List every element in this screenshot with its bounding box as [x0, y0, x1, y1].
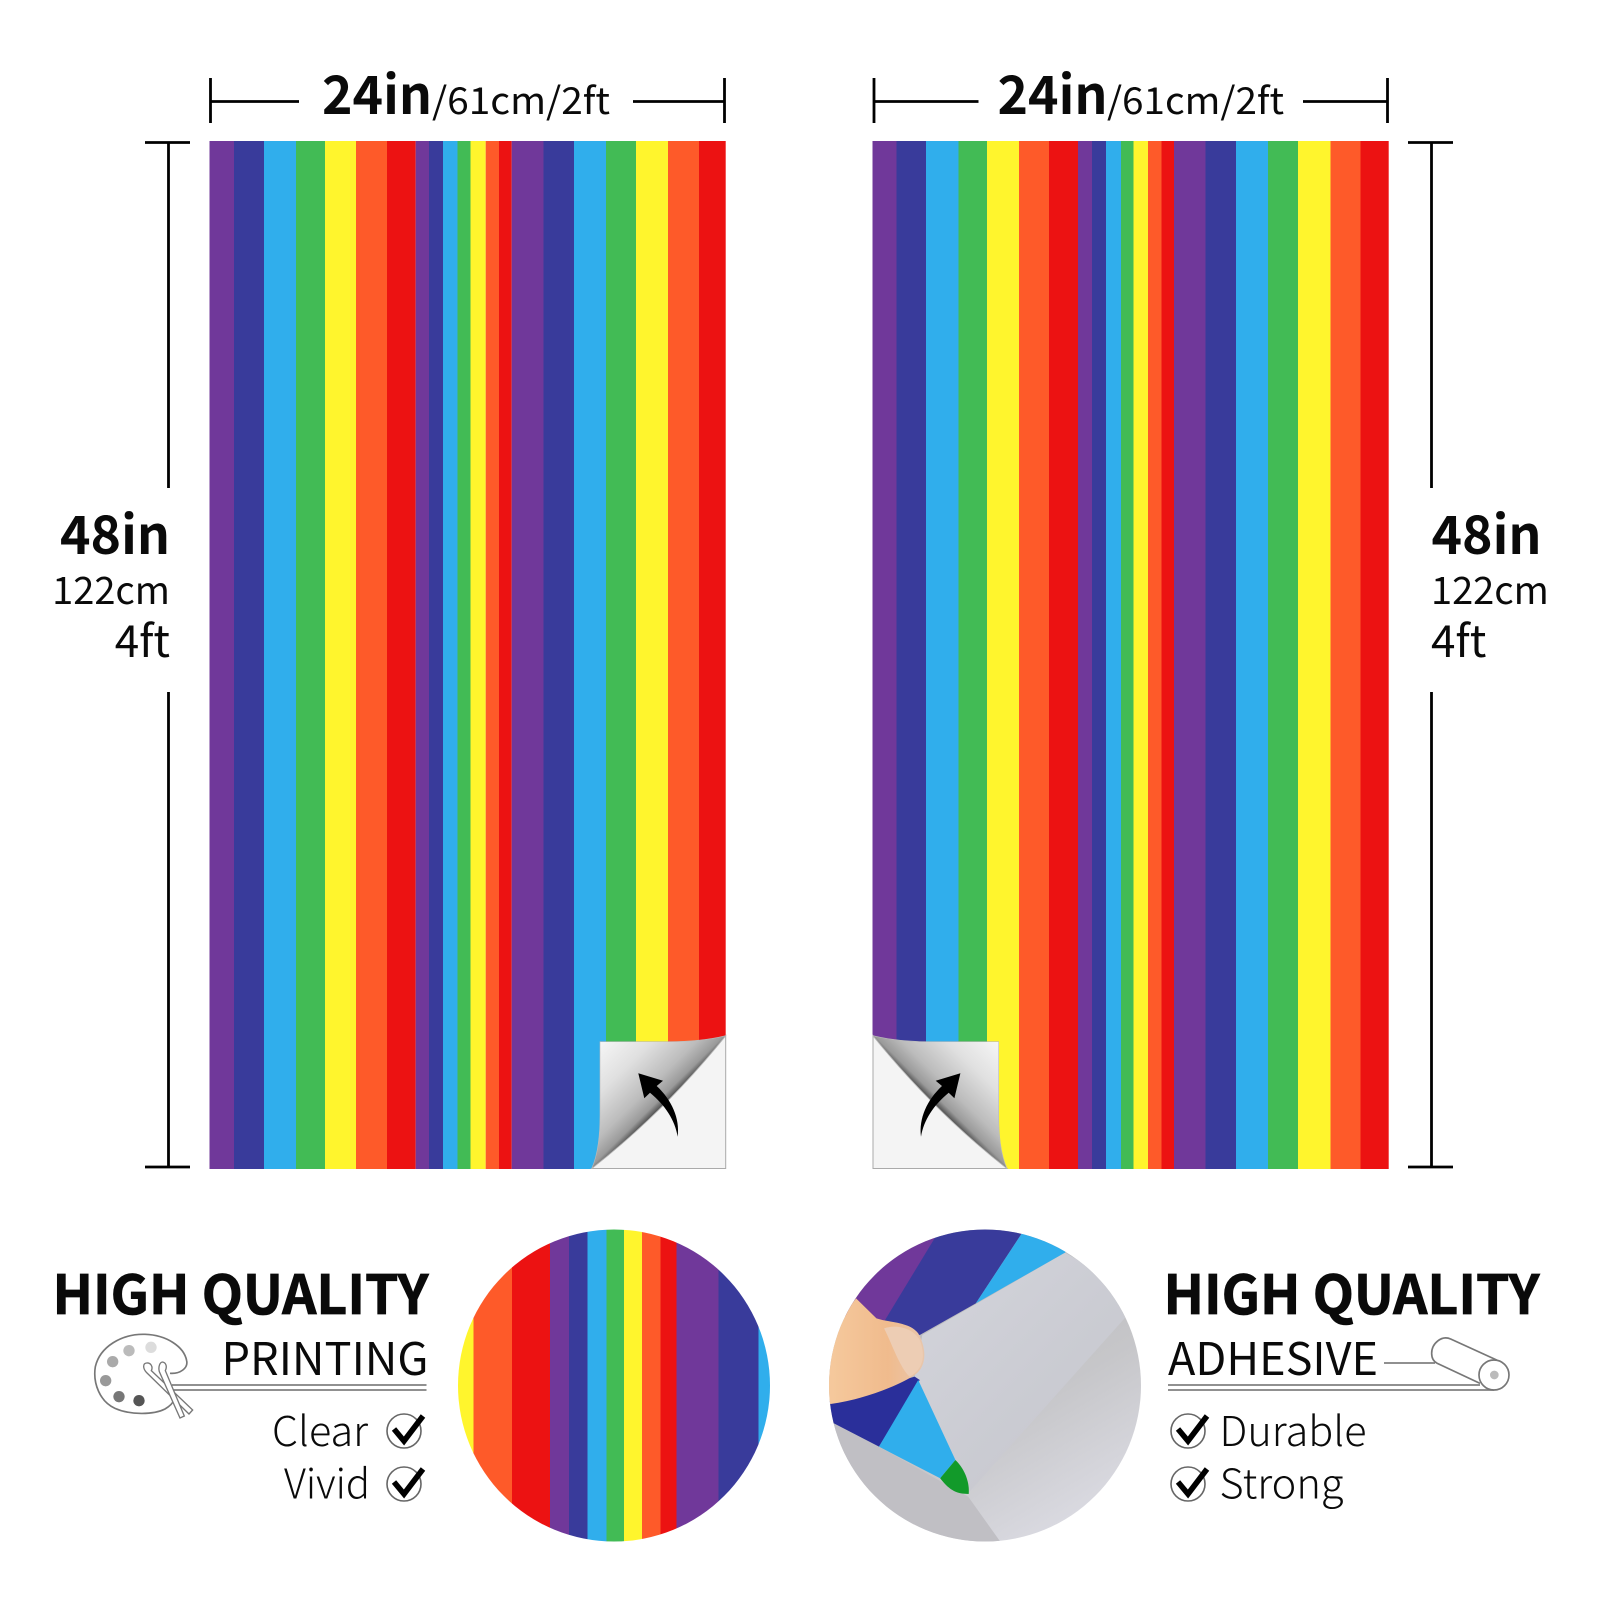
subheading: adhesive: ADHESIVE [1168, 1323, 1378, 1388]
height dimension: right film: 4ft [1431, 606, 1486, 670]
panel: left rainbow film [210, 141, 726, 1169]
panel: right rainbow film [872, 141, 1389, 1169]
block: high quality printing [52, 1251, 429, 1510]
height dimension: left film: 48in [60, 494, 170, 570]
block: high quality adhesive [1164, 1251, 1540, 1510]
heading: high quality printing: HIGH QUALITY [52, 1251, 429, 1330]
item: strong: Strong [1220, 1450, 1344, 1510]
height dimension: right film: 48in [1432, 494, 1542, 570]
circle: printing close-up [458, 1229, 772, 1542]
height dimension: left film: 4ft [115, 606, 170, 670]
thumb [820, 1298, 924, 1404]
rule lines [1168, 1363, 1494, 1390]
icon: check strong [1171, 1467, 1207, 1501]
heading: high quality adhesive: HIGH QUALITY [1164, 1251, 1540, 1330]
peeled corner: right film [873, 1036, 1007, 1168]
width dimension: right film [874, 54, 1388, 130]
height dimension: left film [52, 142, 190, 1167]
circle: adhesive close-up photo [820, 1227, 1147, 1547]
height dimension: left film: 122cm [52, 560, 170, 615]
item: clear: Clear [272, 1398, 368, 1458]
height dimension: right film [1408, 142, 1549, 1167]
width dimension: left film: 24in [322, 54, 432, 130]
peeled corner: left film [592, 1036, 726, 1168]
subheading: printing: PRINTING [222, 1323, 428, 1388]
icon: check clear [387, 1414, 423, 1448]
icon: film roll [1432, 1338, 1509, 1390]
width dimension: right film: /61cm/2ft [1107, 71, 1284, 125]
item: vivid: Vivid [284, 1450, 370, 1510]
height dimension: right film: 122cm [1431, 560, 1549, 615]
width dimension: left film [210, 54, 724, 130]
width dimension: right film: 24in [998, 54, 1108, 130]
icon: check vivid [387, 1467, 423, 1501]
rule lines [172, 1385, 426, 1390]
item: durable: Durable [1220, 1398, 1366, 1458]
icon: palette and brushes [95, 1334, 193, 1418]
width dimension: left film: /61cm/2ft [432, 71, 610, 125]
icon: check durable [1171, 1414, 1207, 1448]
